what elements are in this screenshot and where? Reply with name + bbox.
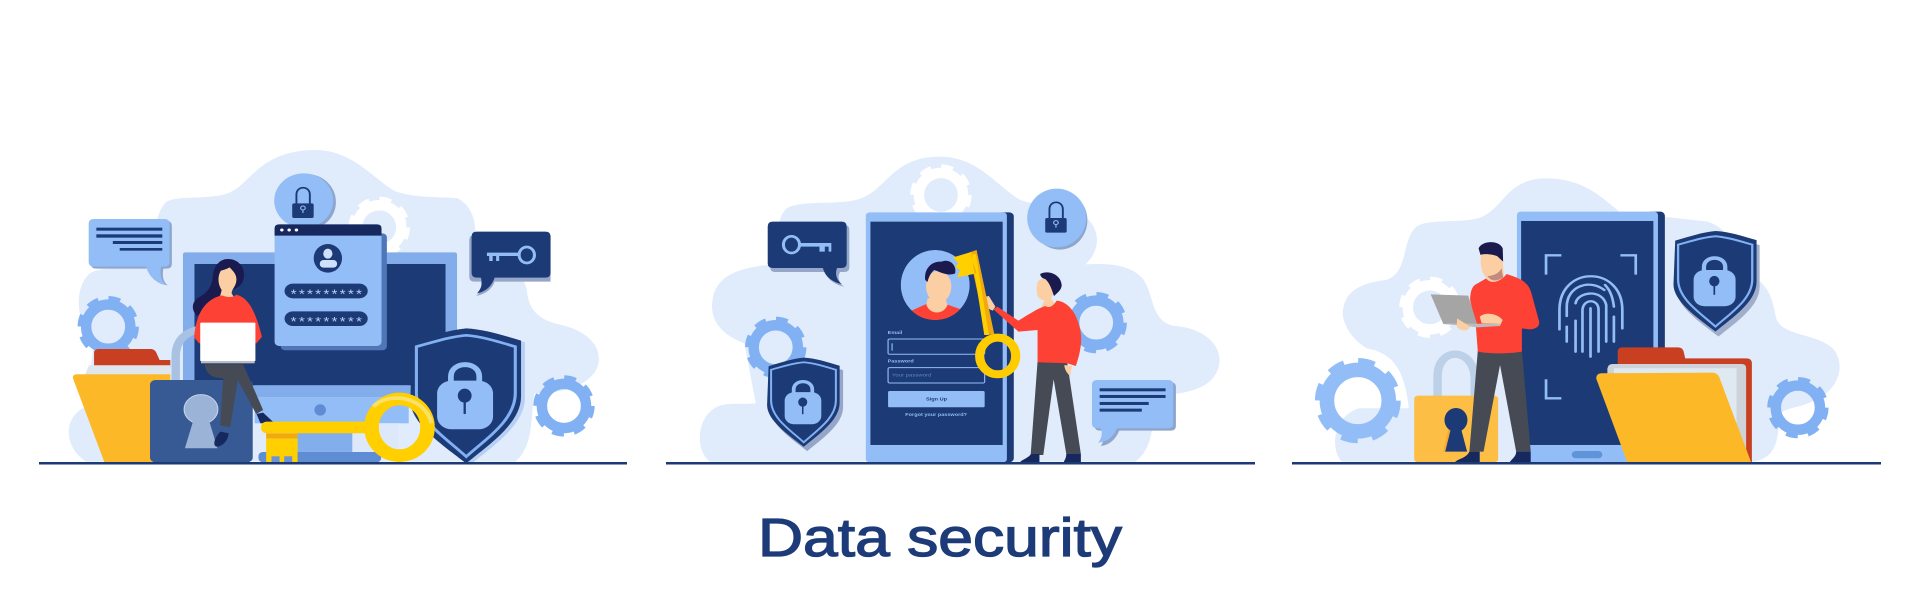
shield (767, 358, 843, 451)
icon: right gear (1069, 295, 1124, 350)
sign-in form: Forgot your password? (905, 412, 967, 418)
lock badge (1027, 189, 1087, 250)
monitor (183, 252, 457, 462)
speech bubble: text lines (1092, 380, 1176, 446)
background blob (1335, 178, 1840, 462)
key ring (372, 398, 432, 456)
background blob (69, 150, 599, 462)
icon: right gear (536, 378, 592, 434)
sign-in form: Sign Up (926, 397, 948, 402)
icon: large left gear (1319, 362, 1396, 439)
shield (1673, 231, 1760, 337)
man in red sweater (981, 272, 1081, 463)
icon: white gear (1402, 280, 1458, 335)
sign-in form: Password (888, 359, 914, 364)
icon: fingerprint (1559, 276, 1622, 357)
ground line right (1292, 462, 1881, 464)
icon: left gear (81, 299, 136, 354)
shield (410, 328, 525, 465)
panel: mobile sign-in (700, 157, 1220, 463)
padlock with keyhole (150, 329, 253, 462)
sign-in form: Your password (892, 373, 931, 378)
padlock (1414, 354, 1498, 462)
login window (275, 224, 387, 350)
login window: ********* (291, 287, 362, 302)
folder (1596, 347, 1752, 462)
panel: fingerprint access (1319, 178, 1840, 462)
background blob (700, 157, 1220, 462)
icon: right gear (1770, 380, 1825, 435)
title: Data security (758, 508, 1122, 568)
sign-in form (888, 330, 985, 418)
infographic canvas (39, 150, 1881, 568)
icon: white gear (913, 167, 969, 223)
login window: ********* (291, 315, 362, 330)
icon: lock badge (274, 173, 336, 230)
man with laptop (1431, 242, 1539, 462)
smartphone (1517, 212, 1665, 462)
icon: white gear (352, 200, 407, 255)
icon: left gear (748, 320, 803, 375)
golden key (953, 250, 1016, 374)
woman with laptop (193, 259, 275, 447)
panel: login on desktop (69, 150, 599, 465)
ground line middle (666, 462, 1255, 464)
scan brackets (1546, 255, 1636, 398)
user avatar (901, 250, 970, 322)
smartphone (866, 212, 1014, 462)
sign-in form: Email (888, 330, 903, 336)
speech bubble: key (768, 222, 849, 287)
ground line left (39, 462, 627, 464)
speech bubble: key (469, 232, 551, 296)
folder (73, 349, 170, 462)
speech bubble: text lines (89, 219, 172, 285)
golden key (261, 422, 372, 462)
